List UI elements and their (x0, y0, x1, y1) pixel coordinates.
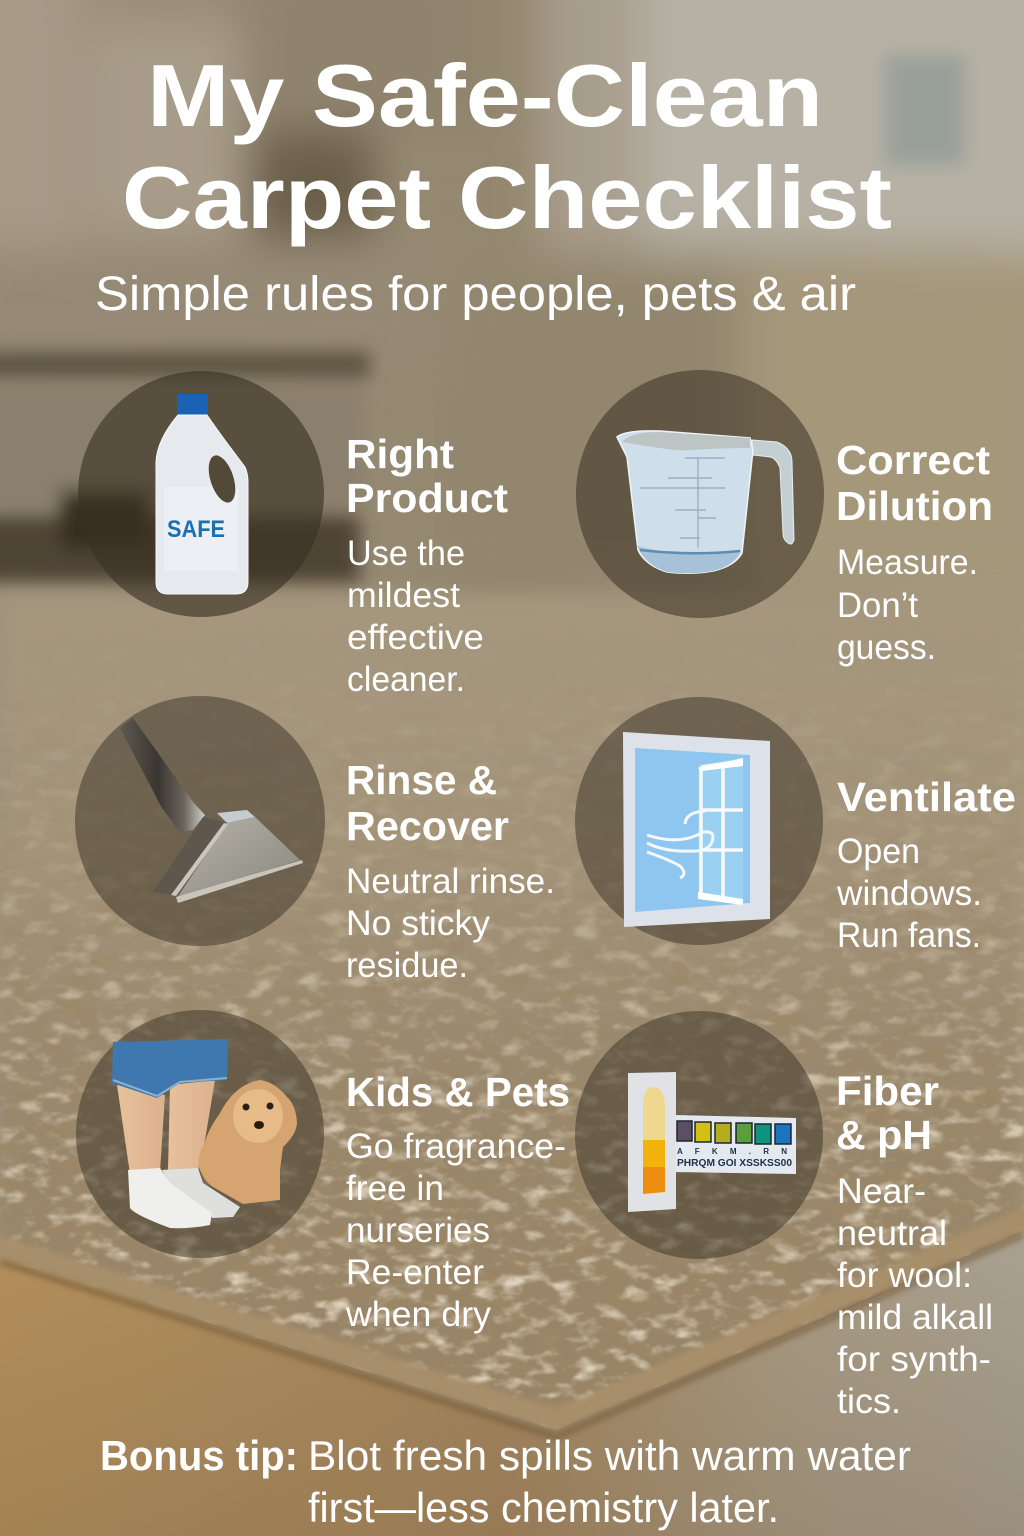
text block: for wool: (837, 1256, 972, 1295)
panel: fiber and pH (575, 1011, 993, 1421)
subtitle: Simple rules for people, pets & air (95, 268, 856, 321)
text block: Go fragrance- (346, 1127, 566, 1166)
text block: effective (347, 618, 484, 657)
text block: nurseries (346, 1211, 490, 1250)
text block: for synth- (837, 1340, 991, 1379)
text block: windows. (836, 874, 982, 913)
heading: Kids & Pets (346, 1069, 570, 1115)
icon: pH test strip: A F K M . R N (677, 1147, 787, 1156)
text block (836, 832, 982, 955)
text block: residue. (346, 946, 468, 985)
icon: pH test strip: PHRQM GOI XSSKSS00 (677, 1157, 792, 1169)
text block (345, 1127, 566, 1334)
title: Carpet Checklist (122, 148, 892, 247)
heading: Fiber (836, 1068, 939, 1114)
text block: No sticky (346, 904, 491, 943)
text block: Open (837, 832, 920, 871)
text block: Measure. (837, 543, 978, 582)
heading: Recover (346, 803, 509, 849)
text block: cleaner. (347, 660, 465, 699)
heading: Product (346, 475, 508, 521)
icon: SAFE bottle (78, 371, 324, 617)
text block: mildest (347, 576, 460, 615)
text block: Neutral rinse. (346, 862, 555, 901)
heading (346, 757, 509, 849)
heading (836, 437, 993, 529)
text block (346, 862, 555, 985)
text block: Near- (837, 1172, 926, 1211)
text block: when dry (345, 1295, 491, 1334)
panel: right product (78, 371, 508, 699)
heading: Correct (836, 437, 990, 483)
heading: Dilution (836, 483, 993, 529)
callout: bonus tip (100, 1432, 911, 1531)
panel: ventilate (575, 697, 1016, 955)
title: My Safe-Clean (147, 46, 823, 145)
text block: mild alkall (837, 1298, 993, 1337)
heading: Ventilate (837, 774, 1016, 820)
icon: measuring cup (576, 370, 824, 618)
panel: rinse and recover (75, 696, 555, 985)
heading: Rinse & (346, 757, 497, 803)
text block: neutral (837, 1214, 947, 1253)
heading (346, 431, 508, 521)
callout: bonus tip: Blot fresh spills with warm water (308, 1432, 911, 1479)
icon: child's legs and puppy (76, 1010, 324, 1258)
text block: Re-enter (346, 1253, 484, 1292)
text block: Run fans. (837, 916, 981, 955)
text block: tics. (837, 1382, 901, 1421)
icon: extractor wand (75, 696, 325, 946)
panel: kids and pets (76, 1010, 570, 1334)
panel: correct dilution (576, 370, 993, 667)
text block: Use the (347, 534, 465, 573)
icon: open window (575, 697, 823, 945)
text block: guess. (837, 628, 936, 667)
title (122, 46, 892, 247)
text block: Don’t (837, 586, 918, 625)
text block (837, 1172, 993, 1421)
text block (837, 543, 978, 667)
heading: & pH (836, 1112, 932, 1158)
heading (836, 1068, 939, 1158)
heading: Right (346, 431, 454, 477)
text block (347, 534, 484, 699)
icon: SAFE bottle: SAFE (167, 516, 225, 543)
text block: free in (346, 1169, 444, 1208)
icon: pH test strip (575, 1011, 823, 1259)
callout: bonus tip: first—less chemistry later. (308, 1484, 779, 1531)
callout: bonus tip: Bonus tip: (100, 1432, 298, 1479)
